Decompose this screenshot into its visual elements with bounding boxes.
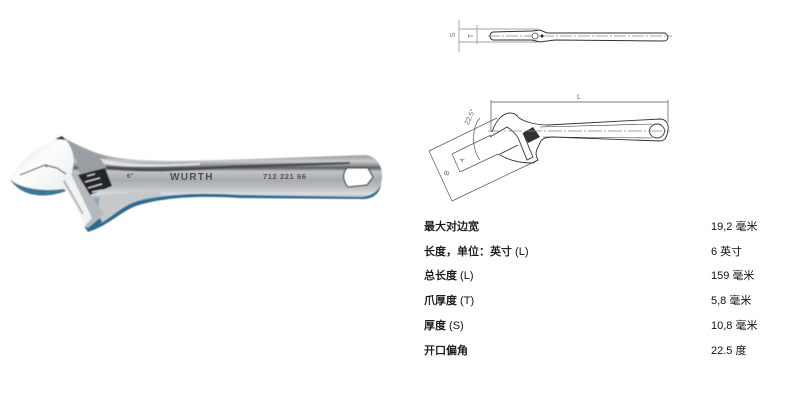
shoulder shading (68, 142, 106, 176)
wrench photo (10, 135, 383, 233)
handle eye slot (344, 168, 373, 187)
row: thickness value: 10,8 毫米 (711, 320, 757, 332)
row: length inches label: 长度，单位：英寸 (L) (424, 246, 528, 258)
row: opening offset label: 开口偏角 (424, 345, 468, 357)
dimension B, A and angle: 22.5° (463, 108, 477, 126)
dimension B, A and angle (429, 108, 538, 201)
row: max width label: 最大对边宽 (424, 221, 479, 233)
technical drawing: top view (428, 94, 670, 202)
scale marks (64, 181, 83, 214)
worm screw (78, 168, 112, 195)
blue lower edge (88, 184, 381, 232)
engraved text: WURTH (170, 172, 214, 183)
dimension L: L (577, 94, 581, 101)
adjusting jaw scale strip (60, 170, 92, 226)
blue jaw underside (10, 179, 66, 195)
centre line (488, 130, 670, 132)
wrench outline (490, 113, 668, 163)
row: opening offset value: 22.5 度 (711, 345, 746, 357)
row: jaw thickness label: 爪厚度 (T) (424, 295, 474, 307)
dimension B, A and angle: A (459, 157, 466, 163)
lower jaw blue tip (84, 218, 102, 232)
row: thickness label: 厚度 (S) (424, 320, 464, 332)
dimension lines S and T (450, 20, 538, 52)
lower jaw (62, 170, 104, 230)
wrench body and handle (60, 138, 382, 230)
knurled screw (523, 127, 540, 143)
dimension B, A and angle: B (443, 169, 452, 177)
lower shoulder metal (96, 190, 160, 226)
row: total length label: 总长度 (L) (424, 270, 474, 282)
fixed jaw (10, 138, 74, 194)
shoulder highlight (100, 158, 200, 167)
dimension lines S and T: T (468, 33, 475, 38)
dimension L (491, 94, 668, 132)
handle groove (106, 162, 350, 171)
engraved text (127, 172, 307, 183)
technical drawing: side view (450, 20, 672, 52)
engraved text: 6" (127, 174, 133, 180)
row: total length value: 159 毫米 (711, 270, 754, 282)
jaw notch (20, 165, 66, 175)
row: max width value: 19,2 毫米 (711, 221, 757, 233)
centre line and pivot (488, 33, 672, 39)
head top point (55, 136, 66, 140)
engraved text: 712 221 66 (263, 172, 307, 181)
wrench side outline (490, 30, 668, 42)
dimension lines S and T: S (450, 32, 457, 37)
row: jaw thickness value: 5,8 毫米 (711, 295, 751, 307)
row: length inches value: 6 英寸 (711, 246, 742, 258)
